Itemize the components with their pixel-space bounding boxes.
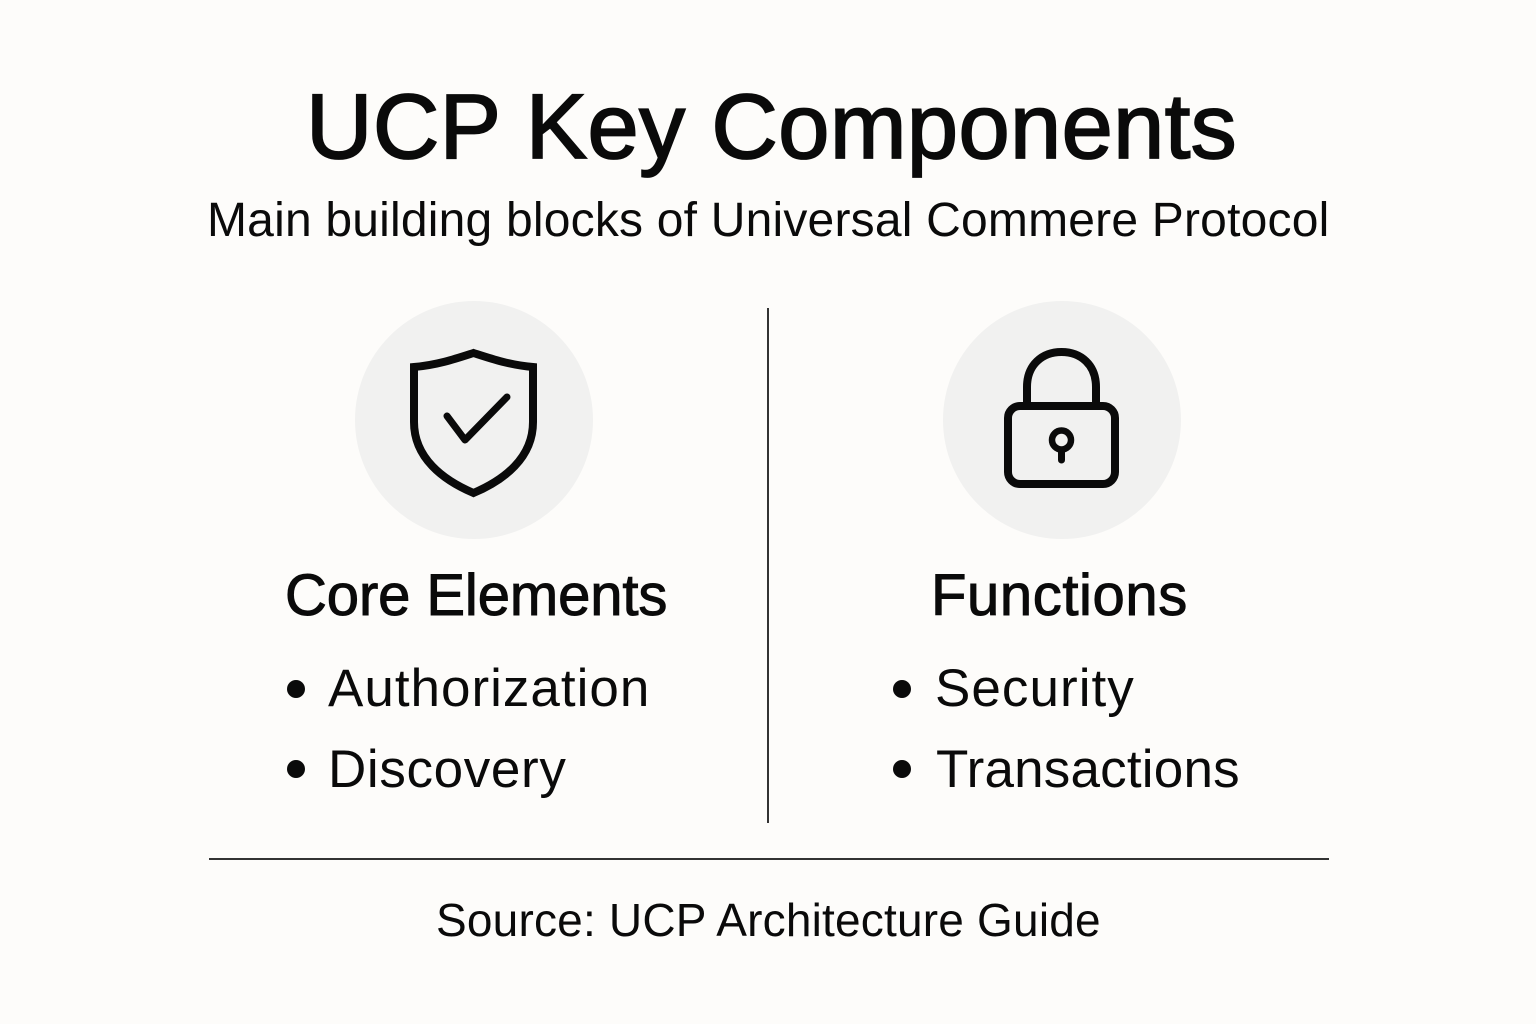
title: UCP Key Components <box>306 76 1237 178</box>
source note: Source: UCP Architecture Guide <box>436 894 1101 946</box>
list: core elements <box>287 659 650 799</box>
bullet item: authorization: Authorization <box>328 659 650 718</box>
heading: functions: Functions <box>931 563 1188 628</box>
icon: padlock <box>943 301 1181 539</box>
bullet item: transactions: Transactions <box>936 740 1240 799</box>
list: functions <box>893 659 1240 799</box>
icon: shield with check <box>355 301 593 539</box>
heading: core elements: Core Elements <box>285 563 667 628</box>
horizontal divider <box>209 858 1329 860</box>
vertical divider <box>767 308 769 823</box>
bullet item: security: Security <box>935 659 1135 718</box>
bullet item: discovery: Discovery <box>328 740 567 799</box>
subtitle: Main building blocks of Universal Commere Protocol <box>207 194 1329 247</box>
